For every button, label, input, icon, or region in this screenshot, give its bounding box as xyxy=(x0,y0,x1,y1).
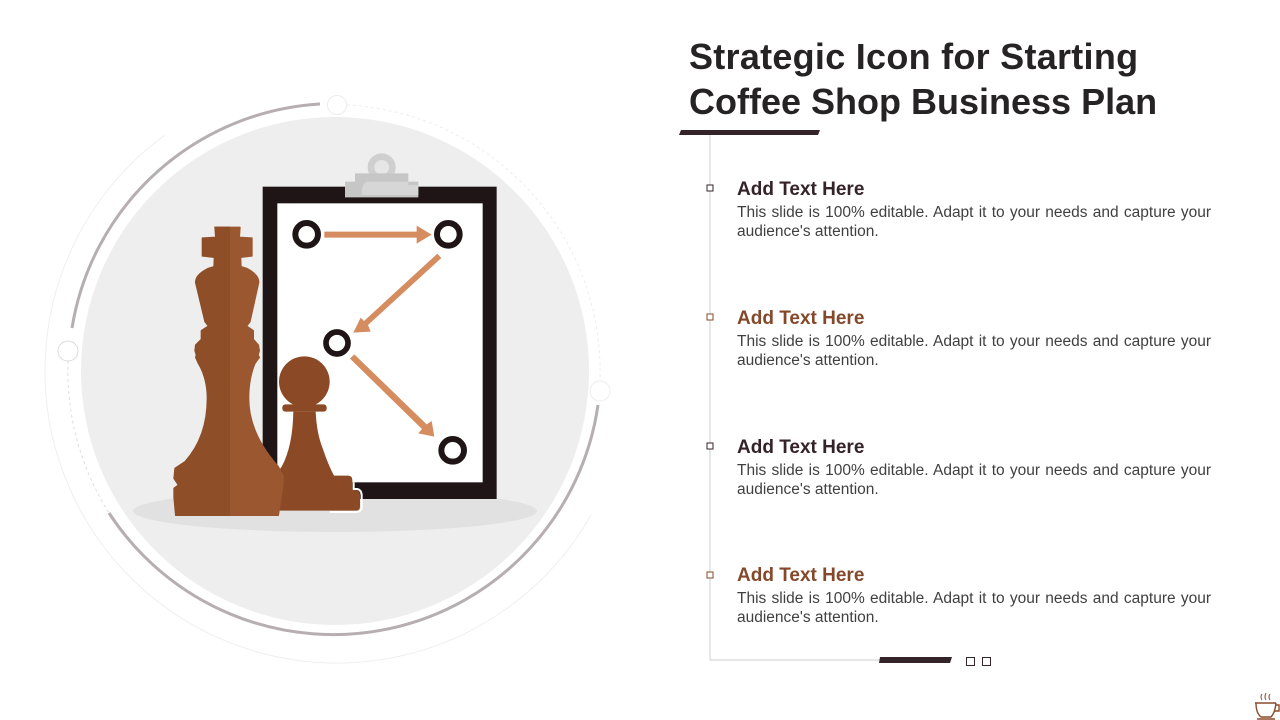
flow node 3 xyxy=(326,332,348,354)
grey arc top left xyxy=(72,104,320,328)
pawn piece xyxy=(277,356,362,512)
outer thin ring xyxy=(45,135,591,663)
clipboard board xyxy=(263,187,497,499)
text block 1: Add Text Here xyxy=(737,179,864,200)
background circle xyxy=(81,117,589,625)
icon: coffee cup xyxy=(1255,693,1279,719)
text block 4: Add Text Here xyxy=(737,565,864,586)
bullet 2 xyxy=(707,314,713,320)
dashed arc bottom left xyxy=(68,361,109,513)
text block 3: This slide is 100% editable. Adapt it to your needs and capture your xyxy=(737,462,1211,479)
bullet 3 xyxy=(707,443,713,449)
ground shadow xyxy=(133,490,537,532)
ring node right xyxy=(590,381,610,401)
ring node top xyxy=(328,96,346,114)
dashed arc top right xyxy=(347,105,600,381)
flow node 2 xyxy=(437,223,460,246)
arrow right xyxy=(324,226,432,244)
text block 3: audience's attention. xyxy=(737,481,879,498)
text block 2 xyxy=(737,308,1211,369)
arrow down left xyxy=(353,254,441,333)
arrow down right xyxy=(350,354,434,437)
bullet 1 xyxy=(707,185,713,191)
text block 1: This slide is 100% editable. Adapt it to your needs and capture your xyxy=(737,204,1211,221)
grey arc bottom right xyxy=(109,405,598,635)
title: Coffee Shop Business Plan xyxy=(689,81,1157,122)
text block 2: audience's attention. xyxy=(737,352,879,369)
text block 4: This slide is 100% editable. Adapt it to your needs and capture your xyxy=(737,590,1211,607)
text block 4: audience's attention. xyxy=(737,609,879,626)
text block 1 xyxy=(737,179,1211,240)
title xyxy=(689,36,1157,122)
text block 3: Add Text Here xyxy=(737,437,864,458)
text block 1: audience's attention. xyxy=(737,223,879,240)
bullet 4 xyxy=(707,572,713,578)
title: Strategic Icon for Starting xyxy=(689,36,1138,77)
king piece xyxy=(174,227,283,515)
clipboard clip xyxy=(345,157,418,197)
flow node 1 xyxy=(295,223,318,246)
footer square 1 xyxy=(966,658,974,666)
flow node 4 xyxy=(441,439,464,462)
timeline axis xyxy=(710,135,880,660)
footer bar xyxy=(879,657,952,663)
ring node left xyxy=(58,341,78,361)
text block 3 xyxy=(737,437,1211,498)
title underline xyxy=(679,130,820,135)
clipboard paper xyxy=(277,203,483,482)
footer square 2 xyxy=(982,658,990,666)
text block 4 xyxy=(737,565,1211,626)
text block 2: Add Text Here xyxy=(737,308,864,329)
text block 2: This slide is 100% editable. Adapt it to your needs and capture your xyxy=(737,333,1211,350)
clipboard illustration xyxy=(174,157,497,515)
